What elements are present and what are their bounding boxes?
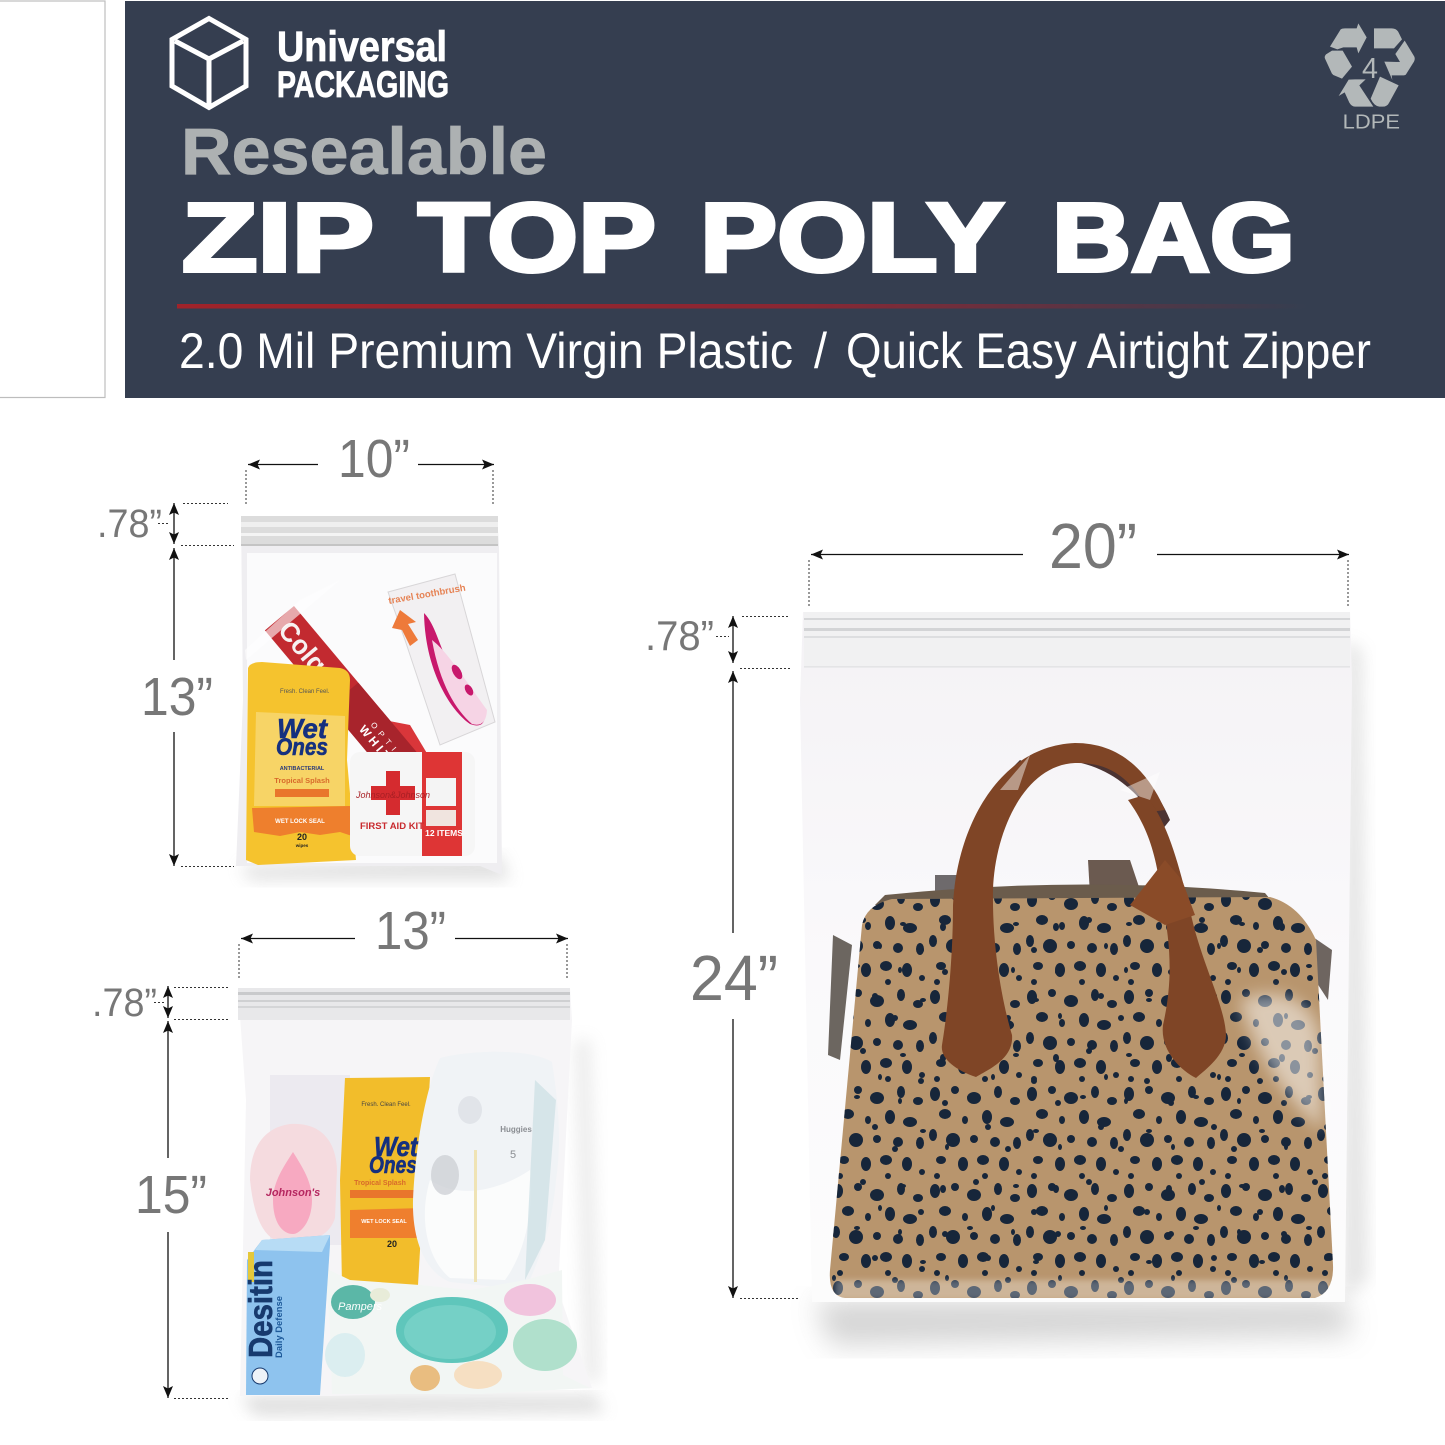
bag shadow	[240, 855, 510, 880]
handle right	[1128, 795, 1226, 1078]
zip strip	[241, 516, 498, 546]
item: Colgate toothpaste	[265, 606, 420, 781]
rear strap	[1050, 747, 1170, 830]
item: Wet Ones wipes: ANTIBACTERIAL	[280, 766, 325, 772]
shoulder strap right	[1310, 935, 1332, 1000]
subtitle: 2.0 Mil Premium Virgin Plastic	[179, 323, 793, 379]
item: Wet Ones wipes: WET LOCK SEAL	[275, 819, 325, 825]
heading: ZIP TOP POLY BAG: TOP	[418, 183, 656, 292]
film shine	[245, 580, 340, 660]
heading: Resealable: Resealable	[181, 114, 547, 188]
item: first aid kit: 12 ITEMS	[425, 828, 463, 838]
bag shadow	[815, 1300, 1352, 1345]
zip strip	[238, 988, 570, 1020]
dimension: 10 inch width	[246, 429, 494, 505]
item: baby wash bottle	[250, 1124, 337, 1240]
zip strip	[804, 612, 1350, 668]
icon: cube	[172, 18, 246, 108]
paper insert	[270, 1075, 350, 1245]
item: Wet Ones wipes: Fresh. Clean Feel.	[280, 689, 330, 695]
zip band	[875, 884, 1275, 905]
bag film	[800, 612, 1352, 1302]
dimension: 24 inch height: 24”	[690, 942, 778, 1014]
dimension: .78 inch zip, medium bag: .78”	[92, 981, 157, 1025]
heading: ZIP TOP POLY BAG	[182, 183, 1295, 292]
dimension: 13 inch height: 13”	[141, 667, 213, 727]
item: Desitin box: Daily Defense	[274, 1296, 284, 1358]
item: Wet Ones wipes: Ones	[276, 734, 328, 761]
item: Wet Ones wipes: 20	[387, 1239, 397, 1249]
shoulder clip left	[828, 935, 852, 1060]
item: Desitin box	[242, 1235, 330, 1395]
heading: ZIP TOP POLY BAG: POLY	[700, 183, 1004, 292]
logo wordmark: Universal	[277, 23, 447, 71]
item: Desitin box: Desitin	[242, 1260, 279, 1358]
item: leopard print handbag	[828, 743, 1333, 1300]
dimension: 10 inch width: 10”	[338, 429, 410, 489]
blank left panel	[0, 1, 105, 398]
item: Wet Ones wipes	[340, 1077, 430, 1285]
item: red first aid tag	[372, 720, 428, 755]
item: Wet Ones wipes: 20	[297, 832, 307, 842]
strap knot	[1130, 860, 1195, 925]
dimension: 13 inch width	[239, 901, 568, 980]
item: first aid kit	[350, 752, 475, 856]
dimension: 20 inch width: 20”	[1049, 510, 1137, 582]
item: diaper	[413, 1052, 559, 1290]
panel: large bag 20 x 24	[800, 612, 1368, 1345]
panel: small bag 10 x 13	[236, 516, 510, 880]
subtitle: Quick Easy Airtight Zipper	[846, 323, 1371, 379]
strap tassel	[1088, 860, 1140, 895]
header banner	[125, 1, 1445, 398]
item: diaper: Huggies	[500, 1125, 532, 1134]
icon: recycling symbol 4 LDPE: 4	[1362, 53, 1378, 85]
item: Colgate toothpaste: OPTIC	[369, 720, 405, 762]
item: Wet Ones wipes	[246, 662, 356, 865]
bag shadow	[240, 1396, 605, 1415]
dimension: .78 inch zip, large bag: .78”	[645, 612, 714, 659]
item: Wet Ones wipes: Tropical Splash	[354, 1180, 406, 1187]
icon: recycling symbol 4 LDPE: LDPE	[1343, 111, 1400, 134]
item: Wet Ones wipes: Wet	[374, 1131, 419, 1162]
item: travel toothbrush card: travel toothbrush	[388, 583, 467, 607]
dimension: 13 inch width: 13”	[375, 901, 446, 961]
dimension: 20 inch width	[809, 510, 1349, 606]
dimension: .78 inch zip, large bag	[645, 612, 792, 668]
item: Wet Ones wipes: Tropical Splash	[274, 776, 330, 785]
item: Wet Ones wipes: Wet	[277, 713, 329, 744]
bag film	[236, 516, 502, 875]
heading: ZIP TOP POLY BAG: ZIP	[182, 183, 374, 292]
item: Colgate toothpaste: WHITE	[356, 722, 400, 771]
bag film	[238, 988, 592, 1396]
item: first aid kit: FIRST AID KIT	[360, 821, 424, 832]
subtitle	[179, 323, 1371, 379]
paper insert	[247, 553, 497, 863]
subtitle: /	[814, 323, 827, 379]
dimension: .78 inch zip, small bag: .78”	[97, 502, 162, 546]
item: first aid kit: Johnson&Johnson	[355, 790, 430, 800]
dimension: .78 inch zip, small bag	[97, 502, 234, 546]
handle left	[942, 743, 1165, 1077]
item: Pampers wipes: Pampers	[338, 1301, 383, 1313]
item: Wet Ones wipes: WET LOCK SEAL	[361, 1219, 407, 1225]
item: Wet Ones wipes: wipes	[295, 843, 309, 848]
item: Colgate toothpaste: Colgate	[272, 615, 357, 708]
item: travel toothbrush card	[388, 574, 495, 745]
dimension: 15 inch height: 15”	[135, 1165, 207, 1225]
icon: recycling symbol 4 LDPE	[1325, 23, 1415, 134]
dimension: .78 inch zip, medium bag	[92, 981, 228, 1025]
item: Wet Ones wipes: Fresh. Clean Feel.	[361, 1102, 411, 1108]
item: Pampers wipes	[325, 1268, 590, 1394]
logo wordmark	[277, 23, 449, 105]
heading: ZIP TOP POLY BAG: BAG	[1052, 183, 1295, 292]
film highlights on bag	[1240, 994, 1322, 1130]
film crease	[1000, 755, 1160, 800]
red divider	[177, 304, 1307, 308]
body	[830, 897, 1333, 1298]
item: baby wash bottle: Johnson's	[266, 1187, 320, 1199]
panel: medium bag 13 x 15	[238, 988, 605, 1415]
logo wordmark: PACKAGING	[277, 64, 449, 105]
item: diaper: 5	[510, 1149, 516, 1161]
item: Wet Ones wipes: Ones	[369, 1152, 417, 1179]
logo: Universal Packaging	[172, 18, 449, 108]
